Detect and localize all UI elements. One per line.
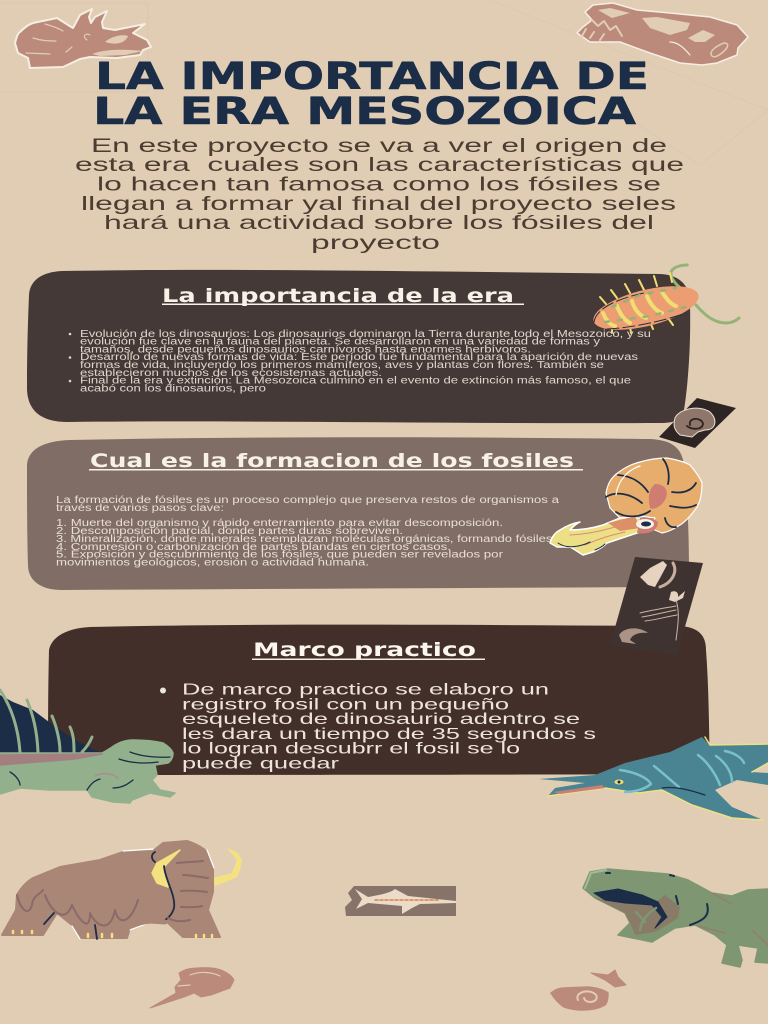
icon: trilobite bbox=[589, 265, 739, 339]
icon: nautilus bbox=[550, 458, 702, 555]
panel text: 1. Muerte del organismo y rápido enterramiento para evitar descomposición. bbox=[56, 518, 503, 529]
panel text: movimientos geológicos, erosión o actividad humana. bbox=[56, 558, 369, 568]
panel bullet list: evolución fue clave en la fauna del planeta. Se desarrollaron en una variedad de formas y bbox=[80, 336, 600, 348]
panel bullet text: registro fosil con un pequeño bbox=[182, 696, 509, 714]
panel bullet list: Desarrollo de nuevas formas de vida: Este período fue fundamental para la aparición de nuevas bbox=[80, 352, 638, 363]
panel: marco practico bbox=[48, 625, 710, 775]
icon: t-rex bbox=[583, 869, 768, 967]
panel heading: Cual es la formacion de los fosiles bbox=[90, 450, 574, 472]
panel heading: La importancia de la era bbox=[162, 285, 514, 307]
panel bullet text: puede quedar bbox=[182, 756, 340, 772]
icon: fossil skeleton card bbox=[610, 557, 703, 655]
panel bullet text bbox=[160, 682, 596, 772]
panel bullet list: Final de la era y extinción: La Mesozoica culminó en el evento de extinción más famoso, el que bbox=[80, 376, 631, 386]
icon: mammoth bbox=[2, 841, 242, 939]
panel bullet list: acabó con los dinosaurios, pero bbox=[80, 384, 266, 394]
panel: la importancia de la era bbox=[27, 270, 690, 423]
intro paragraph: lo hacen tan famosa como los fósiles se bbox=[97, 174, 661, 196]
intro paragraph: llegan a formar yal final del proyecto seles bbox=[81, 193, 676, 215]
intro paragraph: esta era cuales son las características que bbox=[75, 154, 684, 176]
panel text: 3. Mineralización, donde minerales reemplazan moléculas orgánicas, formando fósiles. bbox=[56, 534, 556, 545]
panel text bbox=[56, 495, 560, 568]
panel text: 5. Exposición y descubrimiento de los fósiles, que pueden ser revelados por bbox=[56, 550, 504, 560]
title bbox=[93, 55, 649, 133]
panel bullet text: De marco practico se elaboro un bbox=[182, 682, 549, 698]
intro paragraph: En este proyecto se va a ver el origen de bbox=[91, 135, 667, 157]
panel heading: Marco practico bbox=[253, 639, 476, 661]
icon: fish fossil slab bbox=[345, 886, 456, 916]
title: LA IMPORTANCIA DE bbox=[95, 55, 649, 98]
panel: formacion de los fosiles bbox=[27, 437, 689, 590]
panel text: través de varios pasos clave: bbox=[56, 503, 224, 514]
panel bullet text: esqueleto de dinosaurio adentro se bbox=[182, 711, 580, 728]
icon: triceratops skull bbox=[15, 9, 151, 68]
icon: dimetrodon bbox=[0, 690, 175, 803]
icon: horseshoe crab fossil bbox=[150, 968, 234, 1008]
panel bullet list bbox=[69, 329, 651, 394]
icon: t-rex skull bbox=[577, 3, 748, 65]
intro paragraph bbox=[75, 135, 684, 254]
icon: spiral shell fossil bbox=[551, 970, 626, 1010]
intro paragraph: proyecto bbox=[311, 232, 440, 254]
panel bullet list: formas de vida, incluyendo los primeros mamíferos, aves y plantas con flores. También se bbox=[80, 360, 604, 371]
panel text: La formación de fósiles es un proceso complejo que preserva restos de organismos a bbox=[56, 495, 560, 506]
intro paragraph: hará una actividad sobre los fósiles del bbox=[104, 212, 654, 234]
panel bullet text: lo logran descubrr el fosil se lo bbox=[182, 740, 520, 758]
panel text: 4. Compresión o carbonización de partes blandas en ciertos casos. bbox=[56, 542, 451, 553]
panel bullet text: les dara un tiempo de 35 segundos s bbox=[182, 726, 596, 743]
panel bullet list: establecieron muchos de los ecosistemas actuales. bbox=[80, 368, 382, 379]
panel bullet list: tamaños, desde pequeños dinosaurios carnívoros hasta enormes herbívoros. bbox=[80, 344, 531, 356]
panel text: 2. Descomposición parcial, donde partes duras sobreviven. bbox=[56, 526, 403, 537]
icon: ichthyosaur bbox=[539, 737, 768, 820]
panel bullet list: Evolución de los dinosaurios: Los dinosaurios dominaron la Tierra durante todo el Mesozoico, y su bbox=[80, 329, 651, 340]
icon: ammonite fossil card bbox=[659, 398, 736, 448]
title: LA ERA MESOZOICA bbox=[93, 90, 636, 133]
